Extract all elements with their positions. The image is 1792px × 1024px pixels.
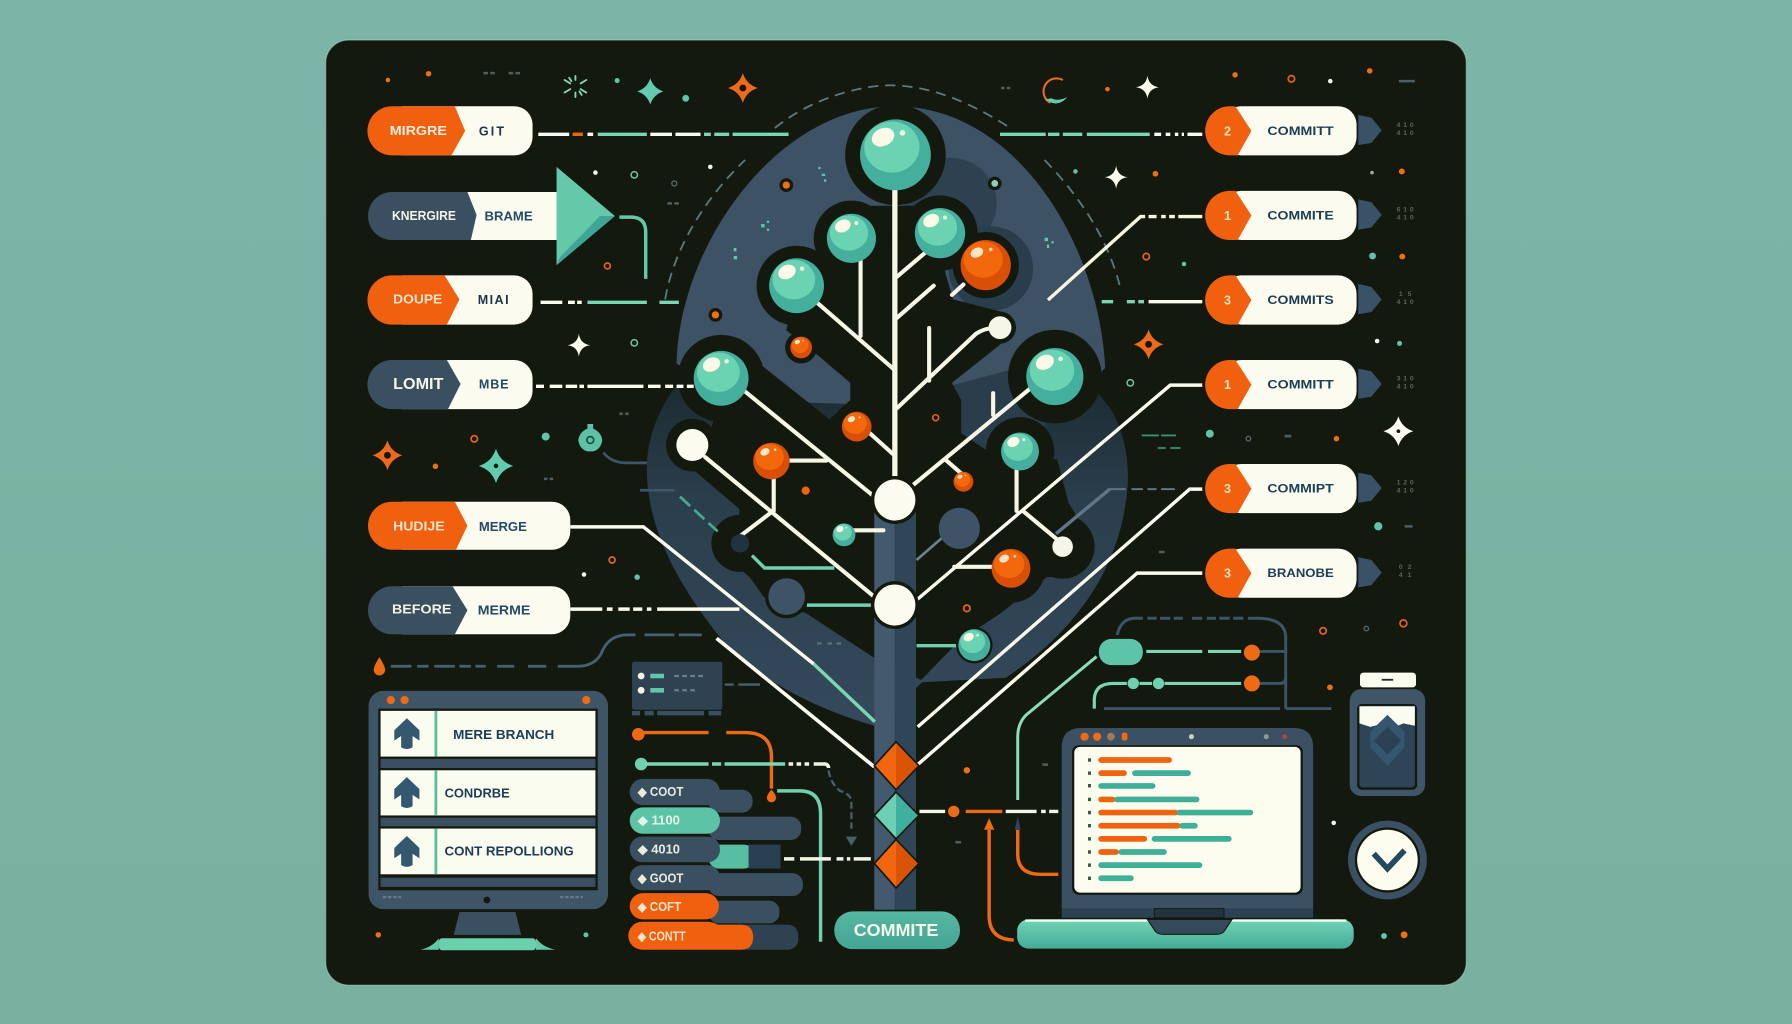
right pill 4: Committ: 1	[1224, 378, 1231, 392]
top node: teal sphere	[860, 119, 931, 190]
left pill: Knergire Brame: KNERGIRE	[392, 209, 456, 223]
laptop	[1017, 728, 1354, 949]
teal sphere	[827, 214, 876, 263]
icon: mint node blob	[578, 424, 602, 451]
left pill: Hudije Merge: HUDIJE	[393, 519, 445, 533]
orange sphere	[753, 443, 790, 479]
branch list: pills: ◆ 1100	[637, 814, 680, 828]
left pill: Knergire Brame: BRAME	[485, 210, 533, 224]
node cluster top right	[1094, 618, 1331, 709]
play triangle icon	[557, 167, 615, 265]
dashed cream connector	[784, 857, 871, 860]
left pill: Mirgre Git	[367, 106, 533, 155]
right pill 2: Commite: 610	[1397, 206, 1414, 213]
star: white right	[1384, 416, 1413, 446]
teal sphere	[956, 627, 993, 663]
right pill 1: Committ	[1205, 106, 1414, 155]
branch list: pills	[628, 779, 753, 950]
trunk	[874, 503, 916, 910]
branch list: pills: ◆ COFT	[637, 900, 681, 914]
orange connector	[632, 728, 776, 802]
branch list: pills: ◆ 4010	[637, 843, 680, 857]
left pill: Hudije Merge: MERGE	[479, 520, 527, 534]
tree canopy backdrop	[647, 106, 1128, 726]
code lines	[1098, 757, 1181, 855]
left pill: Doupe Miai: DOUPE	[393, 292, 442, 306]
scattered dots	[376, 68, 1415, 939]
right pill 3: Commits: 3	[1224, 294, 1231, 308]
branch list: pills: ◆ CONTT	[637, 930, 686, 944]
right pill 5: Commipt: COMMIPT	[1267, 482, 1334, 496]
crescent icon	[1044, 78, 1067, 103]
left connector lines	[391, 134, 875, 767]
commit button	[834, 911, 960, 949]
teal sphere	[1026, 348, 1083, 405]
left pill: Hudije Merge	[368, 502, 570, 550]
right connector lines	[917, 134, 1202, 800]
teal sphere	[1001, 432, 1039, 470]
tree dark hollow	[666, 105, 1102, 680]
right pill 4: Committ	[1205, 360, 1414, 409]
star: white top right	[1136, 76, 1159, 99]
diamond emblem	[1370, 715, 1405, 766]
teal sphere	[769, 258, 824, 313]
left monitor: CONT REPOLLIONG	[445, 843, 574, 858]
branch list: pills: ◆ GOOT	[637, 871, 684, 885]
arrow icons	[394, 718, 419, 867]
right pill 5: Commipt: 120	[1397, 480, 1414, 487]
laptop connector	[919, 806, 1058, 940]
dark main panel	[326, 40, 1466, 985]
star: mint left	[479, 449, 513, 483]
left monitor	[369, 691, 608, 950]
left pill: Lomit Mbe: LOMIT	[393, 376, 444, 393]
right pill 1: Committ: COMMITT	[1267, 124, 1334, 138]
left pill: Before Merme: BEFORE	[392, 603, 451, 617]
left pill: Knergire Brame	[368, 192, 560, 240]
left pill: Lomit Mbe	[367, 360, 533, 409]
commit button: COMMITE	[854, 920, 938, 940]
right pill 6: Branobe: BRANOBE	[1267, 566, 1334, 580]
right pill 4: Committ: 310	[1397, 376, 1414, 383]
slate nodes	[731, 508, 980, 618]
left pill: Before Merme: MERME	[478, 603, 530, 617]
title bar dots	[1080, 733, 1287, 741]
left pill: Doupe Miai	[367, 275, 533, 325]
star: orange top	[728, 73, 758, 103]
right pill 5: Commipt	[1205, 464, 1414, 513]
left monitor: CONDRBE	[445, 786, 510, 801]
orange sphere	[992, 549, 1030, 588]
teal sphere	[915, 208, 965, 258]
right pill 3: Commits: 15	[1399, 291, 1412, 298]
canopy small dots	[709, 167, 1054, 643]
left pill: Lomit Mbe: MBE	[479, 378, 509, 392]
right pill 6: Branobe	[1205, 549, 1412, 598]
branch list: back bars	[709, 790, 803, 950]
right pill 2: Commite: COMMITE	[1267, 208, 1334, 222]
white nodes	[676, 316, 1073, 629]
orange sphere	[961, 240, 1011, 290]
right pill 3: Commits	[1205, 275, 1414, 325]
tree branches	[705, 190, 1057, 598]
right pill 1: Committ: 410	[1397, 122, 1414, 129]
right pill 5: Commipt: 410	[1397, 488, 1414, 495]
right pill 2: Commite	[1205, 191, 1414, 240]
star: orange left	[373, 440, 402, 470]
left pill: Before Merme	[368, 586, 570, 634]
mint tree links	[752, 555, 966, 646]
right pill 2: Commite: 1	[1224, 209, 1231, 223]
left pill: Mirgre Git: MIRGRE	[390, 124, 447, 138]
star: white top left	[567, 334, 590, 357]
star: mint top	[637, 78, 663, 105]
right pill 6: Branobe: 3	[1224, 567, 1231, 581]
dashed arc around canopy	[665, 85, 1120, 299]
commit diamonds	[874, 742, 919, 888]
left pill: Mirgre Git: GIT	[479, 124, 504, 138]
left monitor: MERE BRANCH	[453, 727, 554, 742]
check badge	[1348, 821, 1427, 899]
right pill 6: Branobe: 41	[1399, 572, 1412, 579]
phone device	[1350, 673, 1425, 796]
window buttons	[387, 696, 590, 704]
orange sphere	[842, 412, 872, 441]
mint connector	[635, 758, 857, 942]
sparkle: mint	[565, 76, 586, 97]
right pill 3: Commits: 410	[1397, 299, 1414, 306]
right pill 1: Committ: 2	[1224, 124, 1231, 138]
orange sphere	[790, 337, 812, 358]
right pill 3: Commits: COMMITS	[1267, 293, 1334, 307]
branch list: pills: ◆ COOT	[637, 785, 684, 799]
right pill 1: Committ: 410	[1397, 130, 1414, 137]
small server panel	[632, 662, 760, 713]
orange sphere	[953, 472, 973, 492]
right pill 4: Committ: COMMITT	[1267, 378, 1334, 392]
teal sphere	[694, 351, 749, 406]
orange drop icon	[374, 657, 385, 675]
right pill 4: Committ: 410	[1397, 384, 1414, 391]
right pill 2: Commite: 410	[1397, 214, 1414, 221]
right pill 6: Branobe: 02	[1399, 564, 1412, 571]
right pill 5: Commipt: 3	[1224, 482, 1231, 496]
teal sphere	[833, 523, 855, 546]
left pill: Doupe Miai: MIAI	[478, 293, 509, 307]
star: white upper right	[1105, 166, 1128, 189]
star: orange right	[1134, 329, 1163, 359]
